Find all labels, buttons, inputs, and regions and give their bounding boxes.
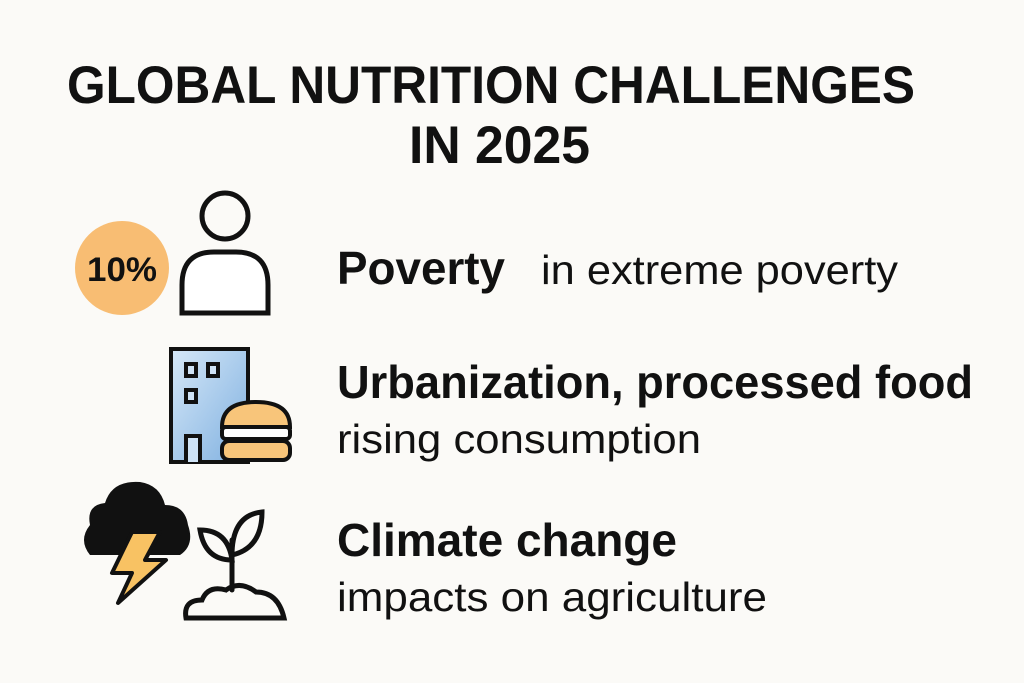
title: GLOBAL NUTRITION CHALLENGES [67,56,915,115]
climate text [337,514,767,620]
climate text: Climate change [337,514,677,566]
poverty text: in extreme poverty [541,247,899,293]
icon: person [182,193,268,313]
icon: seedling [186,512,284,618]
urbanization text [337,356,973,462]
icon: 10% badge [75,221,169,315]
icon: building with burger [171,349,290,462]
title: IN 2025 [409,116,590,175]
icon: 10% badge: 10% [87,251,157,289]
title [67,56,915,175]
poverty text: Poverty [337,242,505,294]
climate text: impacts on agriculture [337,574,767,620]
urbanization text: Urbanization, processed food [337,356,973,408]
urbanization text: rising consumption [337,416,701,462]
icon: storm cloud [84,482,190,603]
poverty text [337,242,899,294]
